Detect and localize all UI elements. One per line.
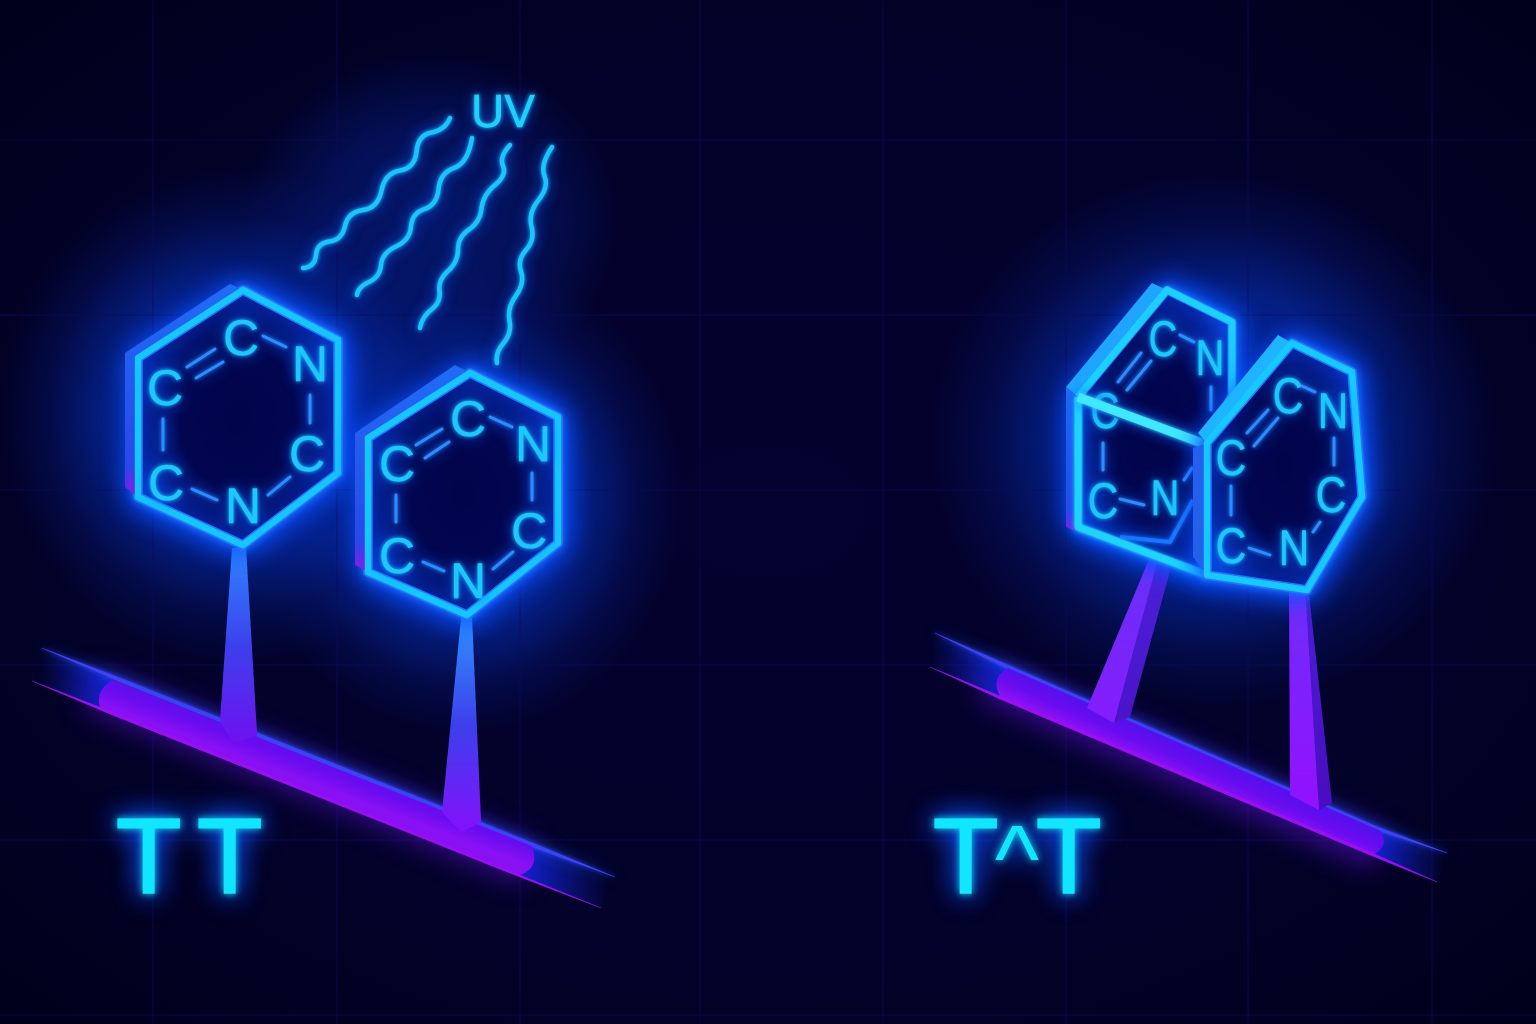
ring labels dimer left: N	[1151, 470, 1179, 526]
ring labels dimer left: C	[1088, 473, 1118, 529]
DNA backbone right	[930, 633, 1447, 882]
ring labels dimer left	[1088, 311, 1224, 542]
ring labels dimer right: N	[1279, 520, 1309, 576]
UV label: UV	[471, 85, 535, 137]
ring labels dimer right: N	[1318, 383, 1348, 439]
TT label: TT	[116, 796, 262, 916]
ring labels dimer right: C	[1316, 467, 1346, 523]
panel: after UV, thymine dimer T^T	[930, 283, 1447, 916]
ring labels right: N	[450, 553, 486, 609]
ring labels left: C	[223, 310, 259, 366]
T^T label: ^	[995, 806, 1040, 912]
ring labels right: N	[515, 416, 551, 472]
stem: right thymine	[442, 618, 481, 832]
stem: dimer left	[1087, 552, 1173, 723]
ring labels left: N	[225, 478, 261, 534]
ring labels dimer right	[1216, 368, 1348, 576]
ring labels left	[147, 310, 328, 534]
ring labels right: C	[511, 503, 547, 559]
ring labels dimer right: C	[1216, 430, 1246, 486]
ring labels right: C	[379, 436, 415, 492]
stem: left thymine	[220, 548, 257, 744]
ring labels left: C	[289, 426, 325, 482]
ring labels dimer left: N	[1196, 330, 1224, 386]
ring labels dimer right: C	[1216, 518, 1246, 574]
UV waves	[303, 118, 552, 363]
ring labels dimer left: C	[1149, 311, 1177, 367]
ring labels left: C	[147, 360, 183, 416]
dimer ring left	[1066, 283, 1232, 575]
ring labels dimer right: C	[1273, 368, 1303, 424]
stem: dimer right	[1289, 585, 1332, 810]
ring labels left: C	[148, 455, 184, 511]
thymine ring left	[125, 284, 338, 545]
ring labels right	[379, 391, 551, 609]
ring labels right: C	[450, 391, 486, 447]
ring labels left: N	[292, 336, 328, 392]
dimer ring right	[1193, 335, 1362, 590]
T^T label: TT	[933, 796, 1101, 916]
ring labels right: C	[379, 528, 415, 584]
thymine ring right	[355, 365, 558, 615]
panel: before UV, separate thymines TT	[32, 85, 615, 916]
DNA backbone left	[32, 648, 615, 908]
ring labels dimer left: C	[1091, 383, 1119, 439]
